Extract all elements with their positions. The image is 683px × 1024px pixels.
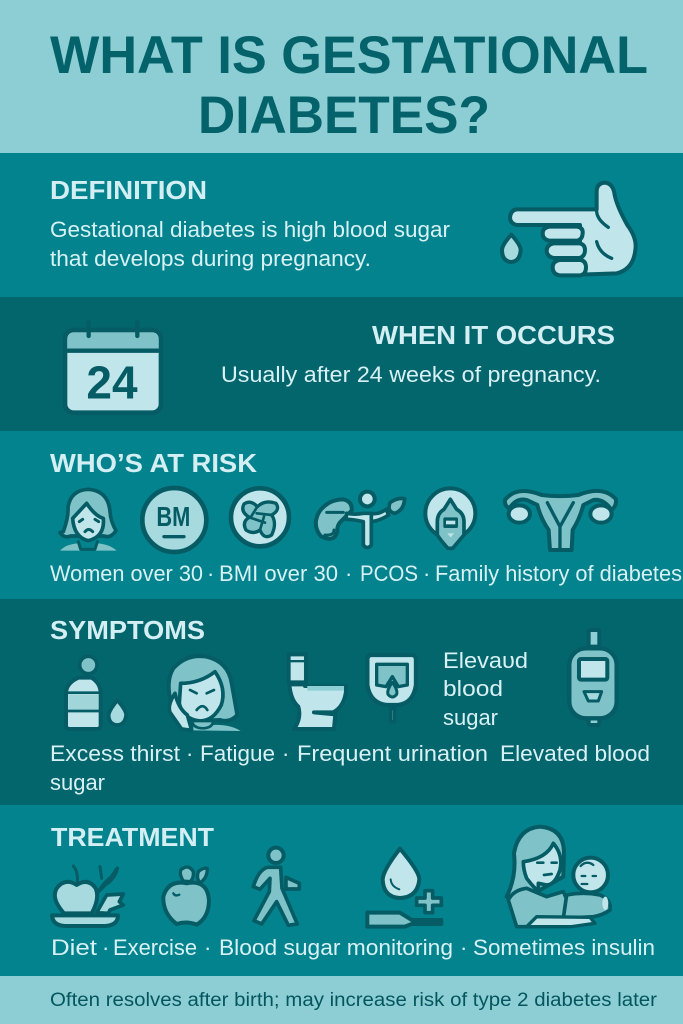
- title banner: WHAT IS GESTATIONAL: [50, 26, 648, 85]
- icon: tired woman: [169, 656, 241, 731]
- panel: when it occurs: WHEN IT OCCURS: [372, 320, 615, 350]
- callout: garbled elevated blood sugar text: sugar: [443, 705, 498, 730]
- icon: glucose meter: [569, 630, 617, 725]
- icon: mother holding baby: [507, 827, 610, 927]
- symptom labels: ·: [186, 741, 193, 766]
- treatment labels: Blood sugar monitoring: [219, 935, 453, 960]
- panel: who's at risk: [0, 431, 683, 599]
- symptom labels: sugar: [50, 770, 105, 795]
- panel: definition: DEFINITION: [50, 175, 207, 205]
- panel: treatment: [0, 805, 683, 976]
- symptom labels: Elevated blood: [500, 741, 650, 766]
- panel: when it occurs: [0, 297, 683, 431]
- treatment labels: ·: [460, 935, 467, 960]
- icon: apple: [163, 867, 209, 925]
- footer note: [0, 976, 683, 1024]
- symptom labels: Frequent urination: [297, 741, 488, 766]
- icon: water bottle and drop: [66, 656, 126, 729]
- icon: calendar: [65, 322, 161, 413]
- panel: treatment: TREATMENT: [51, 822, 214, 852]
- icon: glucose meter drop: [425, 488, 475, 548]
- icon: BMI circle: BM: [156, 501, 190, 532]
- callout: garbled elevated blood sugar text: blood: [443, 676, 503, 701]
- risk factor labels: Women over 30: [50, 561, 203, 586]
- icon: healthy plate: [52, 866, 123, 926]
- treatment labels: [51, 935, 655, 960]
- risk factor labels: BMI over 30: [219, 561, 338, 586]
- risk factor labels: ·: [423, 561, 430, 586]
- risk factor labels: PCOS: [360, 561, 418, 586]
- risk factor labels: [50, 561, 682, 586]
- icon: toilet: [289, 654, 346, 729]
- risk factor labels: ·: [345, 561, 352, 586]
- symptom labels: Excess thirst: [50, 741, 180, 766]
- treatment labels: Diet: [51, 935, 97, 960]
- icon: finger with blood drop: [502, 183, 636, 275]
- treatment labels: ·: [102, 935, 109, 960]
- footer note: Often resolves after birth; may increase risk of type 2 diabetes later: [50, 990, 658, 1011]
- symptom labels: [50, 741, 650, 795]
- callout: garbled elevated blood sugar text: Elevaυd: [443, 648, 528, 673]
- icon: uterus: [505, 491, 616, 550]
- treatment labels: Sometimes insulin: [473, 935, 655, 960]
- title banner: [0, 0, 683, 153]
- icon: blood drop and test strip: [367, 849, 441, 927]
- treatment labels: ·: [204, 935, 211, 960]
- symptom labels: Fatigue: [200, 741, 275, 766]
- panel: definition: Gestational diabetes is high blood sugar: [50, 217, 450, 242]
- icon: PCOS circle: [231, 488, 289, 546]
- title banner: DIABETES?: [198, 86, 490, 145]
- icon: walking person: [253, 848, 299, 925]
- icon: test strip meter: [367, 655, 416, 722]
- icon: woman: [60, 489, 117, 551]
- panel: when it occurs: Usually after 24 weeks of pregnancy.: [221, 362, 601, 387]
- panel: symptoms: SYMPTOMS: [50, 615, 205, 645]
- panel: definition: [0, 153, 683, 297]
- icon: calendar: 24: [86, 356, 138, 408]
- icon: pancreas and artery: [316, 492, 405, 547]
- panel: definition: that develops during pregnancy.: [50, 246, 371, 271]
- risk factor labels: ·: [207, 561, 214, 586]
- treatment labels: Exercise: [113, 935, 197, 960]
- icon: BMI circle: [142, 488, 206, 552]
- risk factor labels: Family history of diabetes: [435, 561, 682, 586]
- symptom labels: ·: [282, 741, 289, 766]
- panel: who's at risk: WHO’S AT RISK: [50, 448, 257, 478]
- callout: garbled elevated blood sugar text: [443, 648, 528, 730]
- panel: symptoms: [0, 599, 683, 805]
